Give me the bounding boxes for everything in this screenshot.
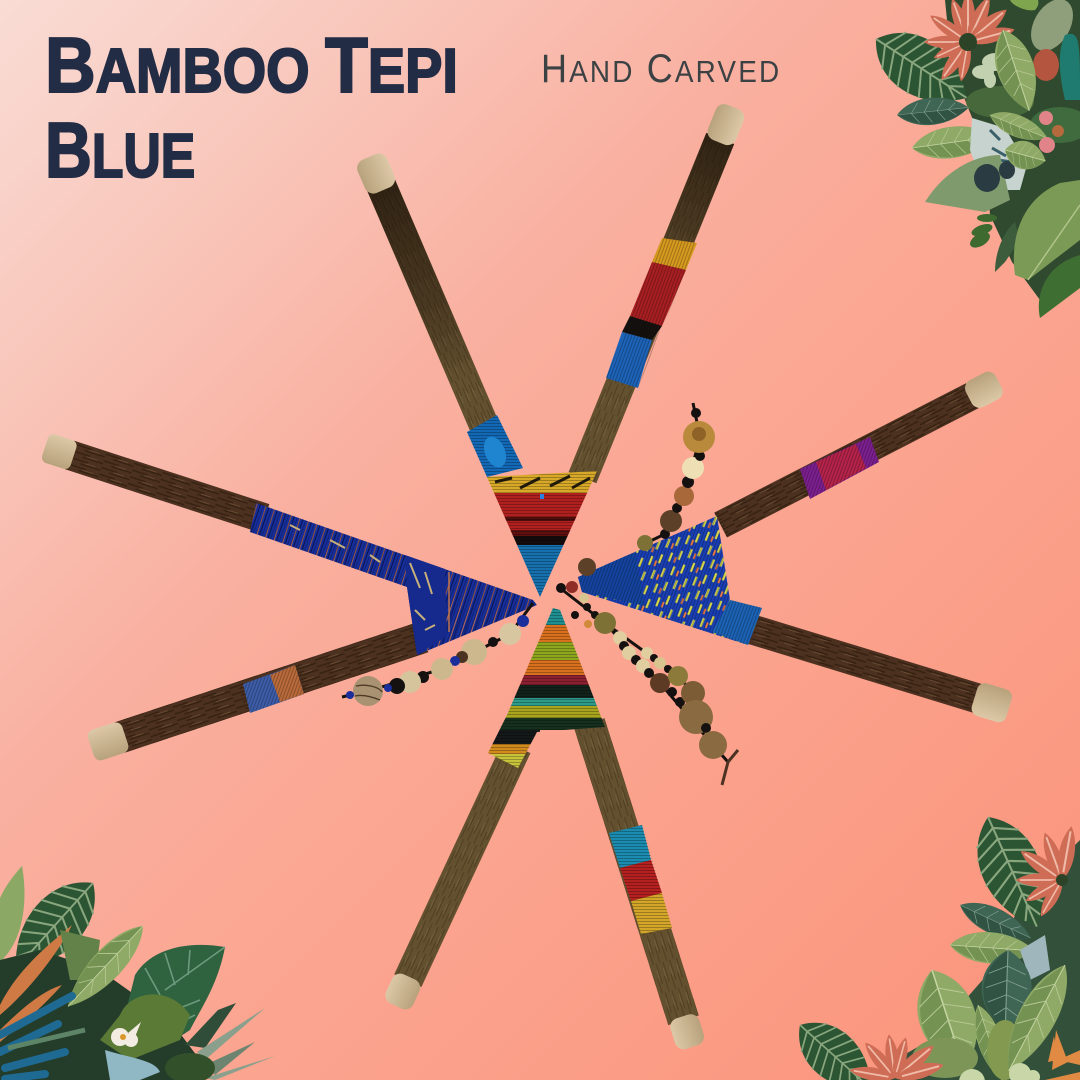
pink flowers <box>1039 111 1055 153</box>
pale tall leaf <box>0 866 24 962</box>
upper shaft <box>40 433 269 533</box>
upper shaft wrap <box>800 437 879 499</box>
title line: Blue: BLUE <box>45 107 195 194</box>
left shaft <box>354 151 501 436</box>
orange bird of paradise <box>1045 1030 1080 1080</box>
tepi stick: bottom pair (A) <box>382 600 707 1052</box>
subtitle: Hand Carved: HAND CARVED <box>541 47 781 91</box>
right shaft colored wrap <box>609 825 672 934</box>
round pale leaf <box>1001 136 1049 175</box>
lower shaft wrap <box>243 665 304 713</box>
fern <box>60 930 100 980</box>
pale small leaves <box>972 53 1010 88</box>
lower shaft <box>746 613 1014 724</box>
tepi stick: right pair <box>578 369 1014 724</box>
upper shaft <box>714 369 1006 538</box>
salmon flower <box>924 0 1016 84</box>
right shaft <box>574 718 707 1052</box>
foliage: top-right corner <box>860 0 1080 318</box>
grey-green leaf <box>910 121 998 164</box>
white flower <box>111 1022 141 1047</box>
bead string: lower right <box>556 558 738 785</box>
dark backing foliage <box>945 0 1080 300</box>
blue woven sleeve and point <box>250 503 537 655</box>
small striped leaf <box>783 1007 887 1080</box>
tepi stick: top pair (V) <box>354 101 747 600</box>
lower shaft <box>86 622 428 762</box>
striped leaf <box>961 805 1064 939</box>
moss and fine foliage at right <box>966 0 1080 143</box>
pale upright leaf <box>985 24 1047 117</box>
green feather <box>8 1030 85 1048</box>
pale slanted leaf <box>992 956 1080 1080</box>
mottled leaf <box>905 961 991 1079</box>
moss right of fern <box>987 1020 1023 1080</box>
left sleeve blue wrap <box>467 415 523 477</box>
fern <box>967 1001 1014 1080</box>
orange bud <box>1052 125 1064 137</box>
blue woven point <box>578 516 762 645</box>
small dark leaves <box>967 214 997 251</box>
tepi stick: left pair <box>40 433 537 762</box>
blue-grey leaf <box>980 949 1033 1031</box>
striped leaf <box>860 15 982 122</box>
dark backing foliage <box>860 840 1080 1080</box>
foliage: bottom-left corner <box>0 865 275 1080</box>
right shaft colored wrap <box>606 238 697 388</box>
dark backing foliage <box>0 950 200 1080</box>
title <box>45 22 458 194</box>
rocks <box>974 161 1015 192</box>
pale horizontal leaf <box>986 105 1052 148</box>
title line: Bamboo Tepi: BAMBOO TEPI <box>45 22 458 109</box>
left shaft <box>382 740 530 1012</box>
moss <box>100 994 190 1060</box>
salmon flower <box>1016 825 1079 919</box>
waterfall hint <box>1020 935 1050 980</box>
dark leaf <box>896 94 970 128</box>
big striped leaf <box>125 945 225 1040</box>
orange ray leaves <box>0 925 72 1042</box>
water <box>105 1050 160 1080</box>
waterfall <box>970 118 1027 190</box>
lower salmon flower <box>848 1033 946 1080</box>
foliage: bottom-right corner <box>783 805 1080 1080</box>
A woven point with colored bands <box>488 608 605 768</box>
dark striped leaf <box>0 865 113 987</box>
narrow dark leaf <box>995 222 1020 272</box>
V woven point <box>487 471 597 597</box>
grey leaf <box>949 929 1036 967</box>
pale fruit <box>959 1063 1040 1080</box>
bead string: lower left <box>342 603 533 706</box>
large green leaves <box>1014 180 1080 280</box>
pale leaf <box>57 916 154 1017</box>
stripy pale leaf <box>925 155 1010 212</box>
moss <box>912 1038 978 1078</box>
blue feather fan <box>0 996 72 1079</box>
dark leaf <box>954 893 1036 950</box>
spiky leaves <box>165 1003 275 1080</box>
right shaft <box>569 101 747 483</box>
bead string: upper <box>637 403 715 551</box>
